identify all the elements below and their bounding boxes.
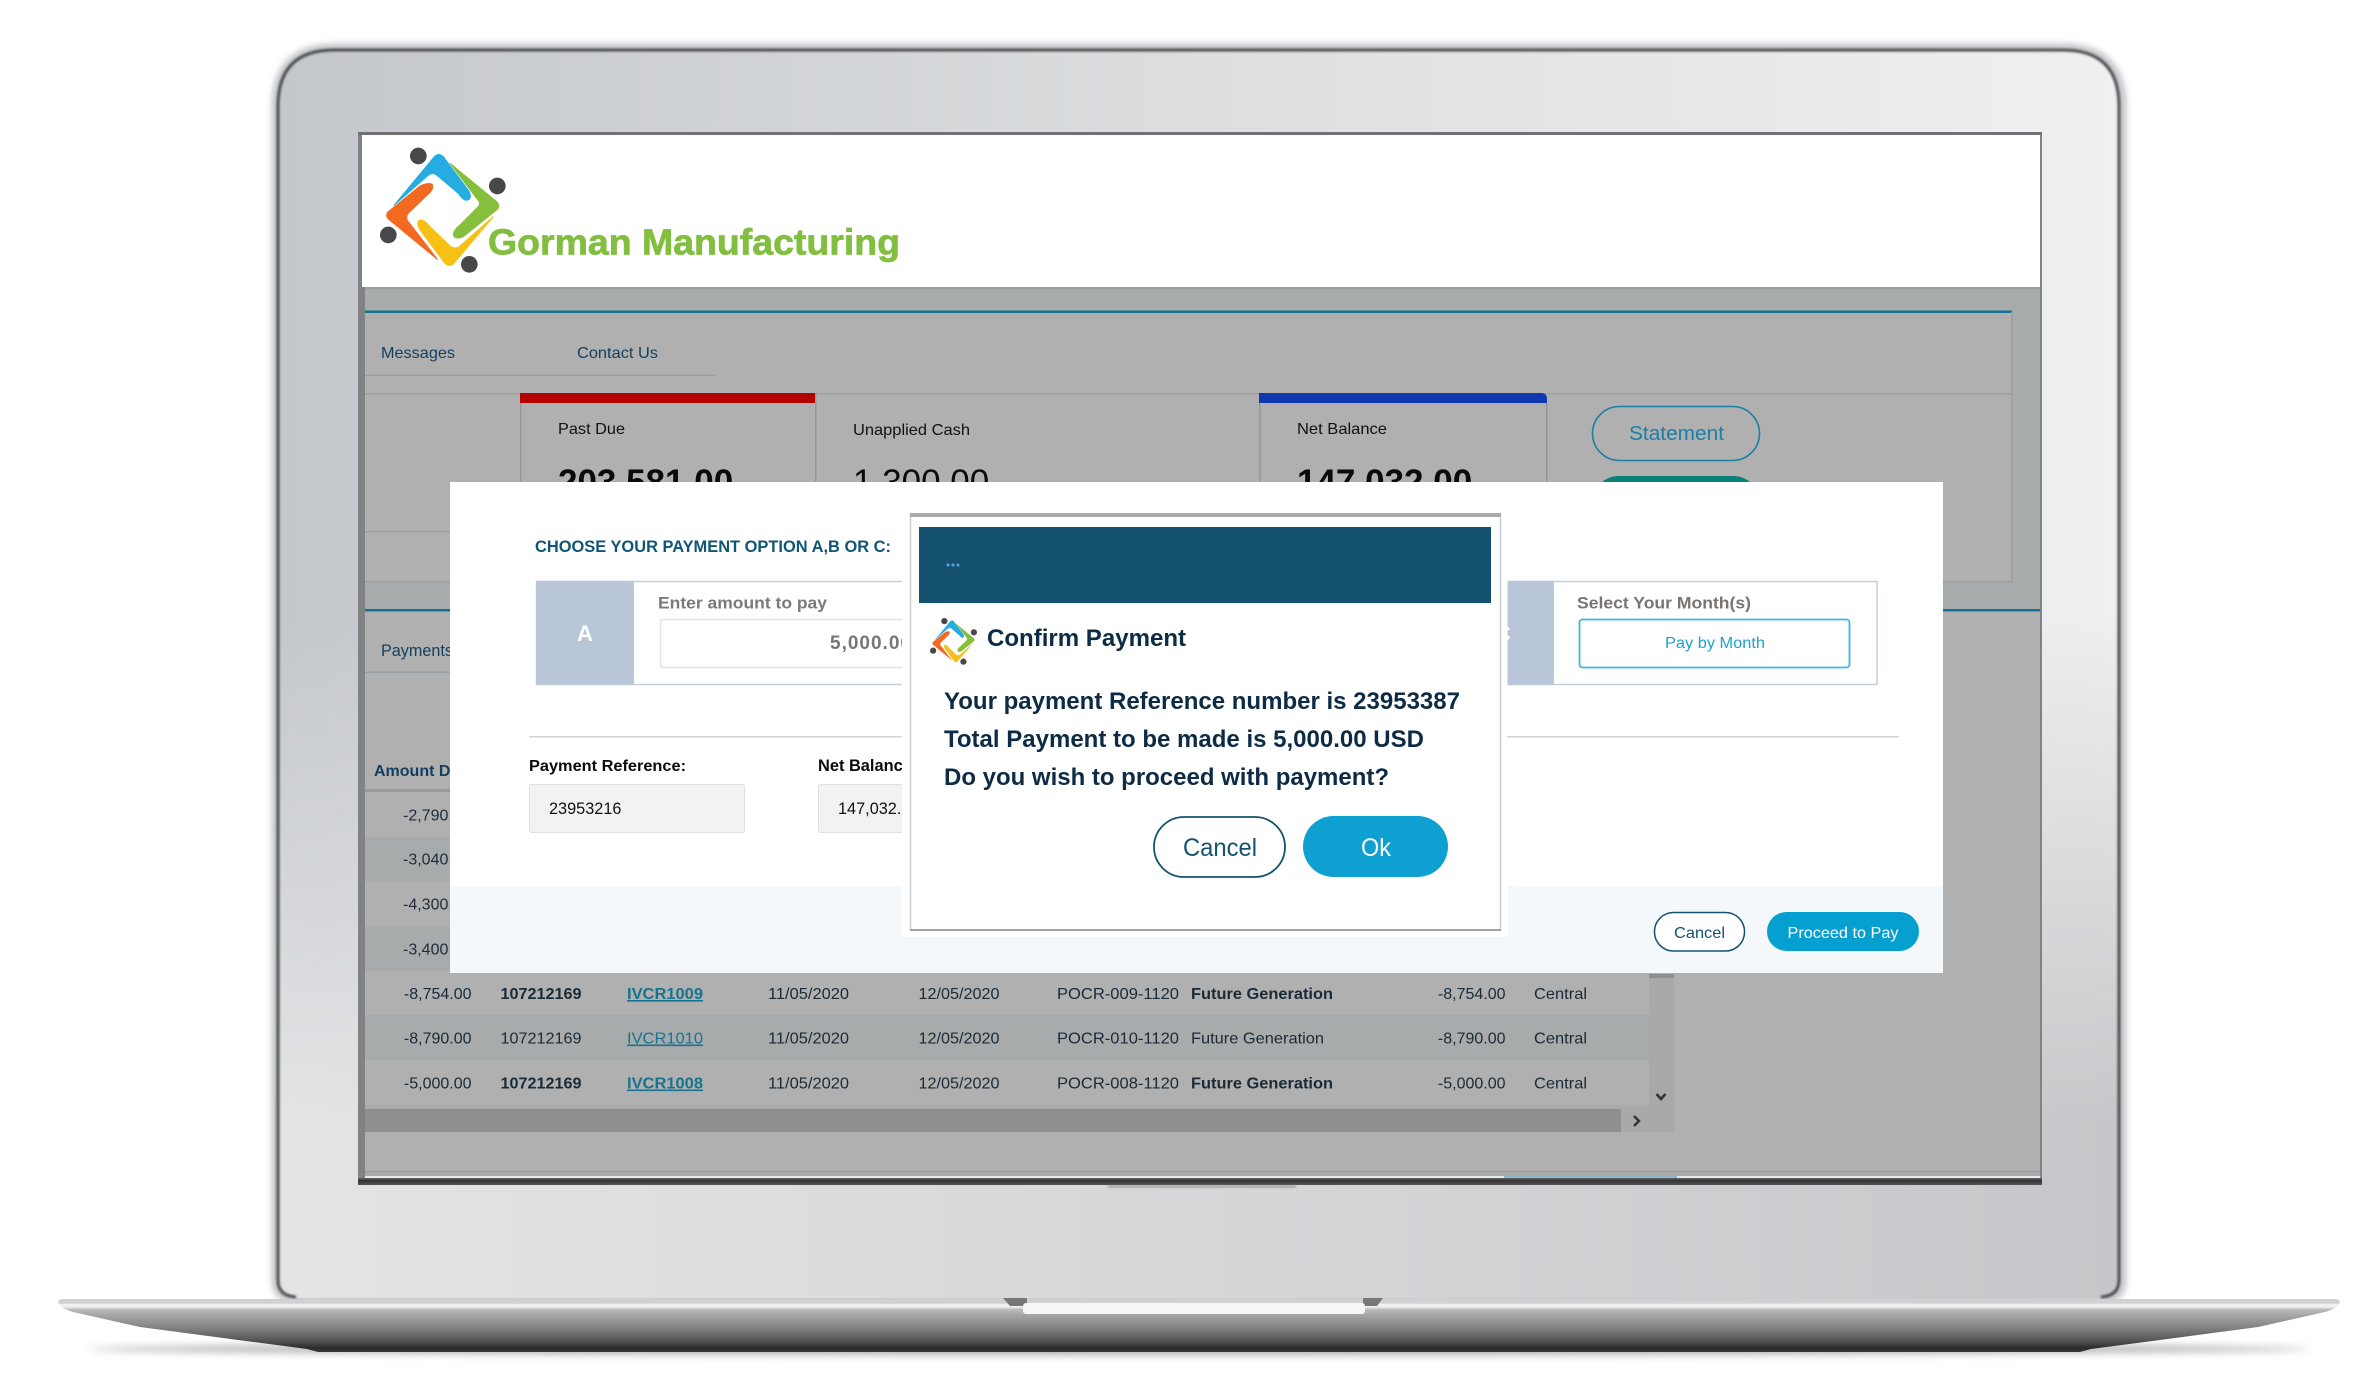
table: -4,300.00: [403, 896, 471, 914]
net balance field: Net Balance:: [818, 757, 917, 775]
dialog header bar: [919, 527, 1491, 603]
card: past due: Past Due: [558, 421, 625, 438]
screen frame: [358, 132, 2042, 1185]
option A: A: [577, 621, 593, 646]
table row 3: Central: [1534, 1076, 1587, 1092]
table row 3: -5,000.00: [1438, 1076, 1506, 1092]
payment reference field: [529, 758, 744, 832]
dialog message: [944, 688, 1460, 791]
table row 2: Future Generation: [1191, 1030, 1324, 1048]
pay by month button: Pay by Month: [1665, 635, 1765, 652]
payment options modal: [450, 482, 1943, 973]
card: past due: [520, 393, 816, 482]
navigation tabs: Contact Us: [577, 345, 658, 362]
company name: Gorman Manufacturing: [488, 222, 900, 262]
proceed to pay button: Proceed to Pay: [1788, 925, 1898, 942]
table row 1: Central: [1534, 986, 1587, 1003]
table row 2: -8,790.00: [1438, 1030, 1506, 1048]
table row 3: 12/05/2020: [918, 1076, 1000, 1092]
option C: C: [1495, 621, 1511, 646]
table row 2: 11/05/2020: [768, 1030, 849, 1048]
statement button: [1592, 406, 1760, 460]
table row 2: IVCR1010: [627, 1030, 703, 1048]
table row 2: POCR-010-1120: [1057, 1030, 1179, 1048]
payment reference field: Payment Reference:: [529, 758, 686, 775]
table row 3: IVCR1008: [627, 1076, 703, 1092]
table row 3: 11/05/2020: [768, 1076, 849, 1092]
table: -3,400.00: [403, 942, 471, 958]
table row 3: 107212169: [500, 1076, 582, 1092]
laptop base notch: [1003, 1298, 1383, 1314]
option A: Enter amount to pay: [658, 594, 828, 612]
option A: 5,000.00: [830, 633, 912, 654]
table row 1: IVCR1009: [627, 986, 703, 1003]
laptop base: [58, 1298, 2340, 1355]
screen bottom band: [358, 1176, 2042, 1188]
table row 3: -5,000.00: [404, 1076, 472, 1092]
option C: Select Your Month(s): [1577, 594, 1751, 612]
table: -2,790.00: [403, 808, 471, 824]
table scrollbars: [365, 974, 1674, 1132]
table row 2: Central: [1534, 1030, 1587, 1048]
table row 1: POCR-009-1120: [1057, 986, 1179, 1003]
table row 1: -8,754.00: [404, 986, 472, 1003]
dialog message: Your payment Reference number is 23953387: [944, 688, 1460, 715]
table row 1: 11/05/2020: [768, 986, 849, 1003]
payments tab: Payments: [381, 642, 453, 660]
card: net balance: [1259, 393, 1548, 482]
modal cancel button: [1654, 912, 1744, 951]
table: [365, 765, 1586, 1092]
card: unapplied cash: [854, 424, 988, 482]
statement button: Statement: [1629, 423, 1724, 445]
card: net balance: 147,032.00: [1297, 463, 1472, 502]
dialog title: Confirm Payment: [987, 625, 1186, 652]
payment reference field: 23953216: [549, 800, 621, 818]
logo: Gorman icon: [380, 148, 506, 273]
table row 1: [404, 988, 1586, 1002]
dialog logo: [930, 618, 977, 665]
option C: [1450, 581, 1877, 685]
app header with logo: [380, 148, 900, 273]
table row 2: 12/05/2020: [918, 1030, 1000, 1048]
card: past due: 203,581.00: [558, 463, 733, 502]
dialog cancel button: Cancel: [1183, 834, 1257, 862]
table row 3: [404, 1077, 1586, 1092]
table row 1: 12/05/2020: [918, 986, 1000, 1003]
table row 1: Future Generation: [1191, 986, 1333, 1003]
table row 2: -8,790.00: [404, 1030, 472, 1048]
navigation tabs: [365, 345, 716, 376]
dialog message: Do you wish to proceed with payment?: [944, 764, 1389, 791]
navigation tabs: Messages: [381, 345, 455, 362]
dialog ok button: [1303, 816, 1448, 877]
net balance field: [818, 757, 1034, 832]
card: net balance: Net Balance: [1297, 421, 1387, 438]
table row 1: -8,754.00: [1438, 986, 1506, 1003]
table row 3: POCR-008-1120: [1057, 1076, 1179, 1092]
dialog ok button: Ok: [1361, 834, 1391, 862]
laptop lid: [276, 48, 2122, 1298]
teal button: [1602, 476, 1750, 482]
pay by month button: [1580, 620, 1850, 668]
option A: [536, 581, 960, 685]
card: unapplied cash: Unapplied Cash: [853, 422, 970, 439]
table: -3,040.00: [403, 852, 471, 868]
modal cancel button: Cancel: [1674, 925, 1725, 942]
dimmed application background: [365, 287, 2041, 1177]
modal heading: CHOOSE YOUR PAYMENT OPTION A,B OR C:: [535, 538, 891, 556]
dialog message: Total Payment to be made is 5,000.00 USD: [944, 726, 1424, 753]
dialog cancel button: [1154, 817, 1285, 877]
table row 2: [404, 1032, 1586, 1046]
payments tab: [365, 644, 450, 673]
table row 3: Future Generation: [1191, 1076, 1333, 1092]
table: Amount Due: [374, 763, 469, 780]
net balance field: 147,032.00: [838, 800, 920, 818]
proceed to pay button: [1767, 912, 1919, 951]
confirm payment dialog: [902, 482, 1508, 937]
table row 1: 107212169: [500, 986, 582, 1003]
table row 2: 107212169: [500, 1030, 582, 1048]
card: unapplied cash: 1,300.00: [853, 463, 989, 502]
